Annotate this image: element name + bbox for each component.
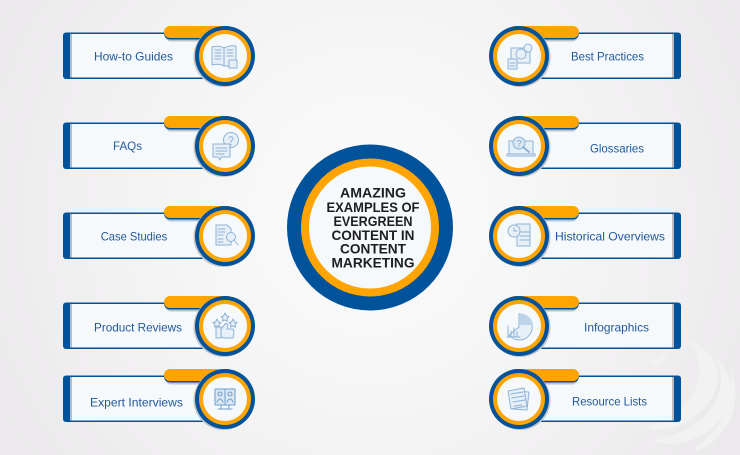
- icon: screen with gears: [508, 44, 532, 69]
- center title: MARKETING: [332, 254, 415, 270]
- card: Infographics: [489, 296, 681, 357]
- icon: pie chart and bars: [507, 314, 533, 340]
- icon: stacked papers: [508, 388, 529, 410]
- label: How-to Guides: [94, 50, 173, 64]
- label: Resource Lists: [572, 394, 647, 408]
- icon: open book: [212, 46, 237, 68]
- center title: CONTENT: [340, 240, 406, 256]
- center circle: [287, 144, 453, 310]
- label: Case Studies: [101, 230, 167, 244]
- icon: book with magnifier: [507, 137, 535, 156]
- label: Best Practices: [571, 50, 644, 64]
- icon: clock and document: [508, 224, 530, 246]
- icon: thumbs up with stars: [213, 313, 237, 338]
- center title: [326, 184, 420, 270]
- center title: EXAMPLES OF: [326, 199, 420, 215]
- card: Glossaries: [489, 116, 681, 177]
- label: Product Reviews: [94, 320, 182, 334]
- card: Expert Interviews: [63, 369, 255, 430]
- label: Expert Interviews: [90, 396, 183, 410]
- label: Historical Overviews: [555, 230, 665, 244]
- center title: CONTENT IN: [332, 227, 414, 243]
- card: How-to Guides: [63, 26, 255, 87]
- label: Glossaries: [590, 142, 644, 156]
- card: FAQs: [63, 116, 255, 177]
- card: Product Reviews: [63, 296, 255, 357]
- label: FAQs: [113, 139, 142, 153]
- icon: video interview screen: [215, 389, 235, 409]
- card: Best Practices: [489, 26, 681, 87]
- label: Infographics: [584, 320, 649, 334]
- icon: speech bubbles with question mark: [213, 132, 238, 160]
- center title: EVERGREEN: [334, 213, 412, 229]
- center title: AMAZING: [340, 184, 406, 200]
- card: Case Studies: [63, 206, 255, 267]
- card: Resource Lists: [489, 369, 681, 430]
- globe watermark: [645, 340, 735, 451]
- card: Historical Overviews: [489, 206, 681, 267]
- icon: document and magnifier: [216, 225, 238, 245]
